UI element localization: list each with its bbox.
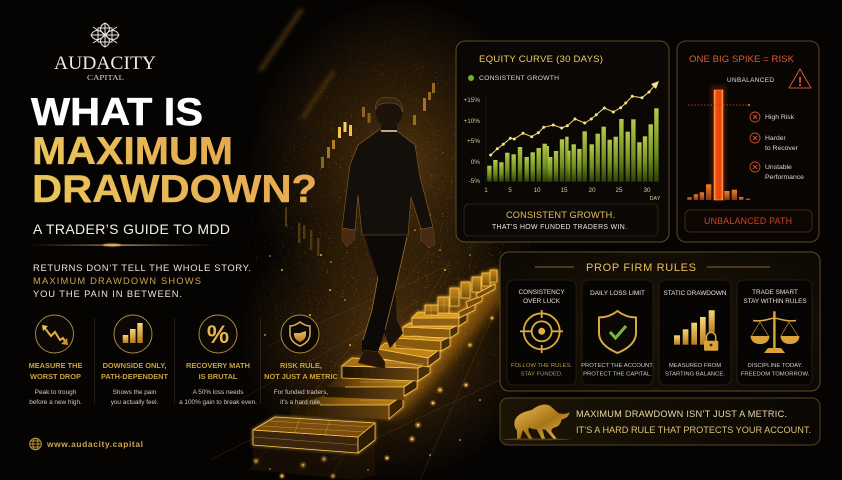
bottom banner	[500, 398, 820, 445]
feature: recovery math	[179, 315, 257, 406]
panel callout	[685, 210, 812, 232]
x axis labels	[484, 187, 661, 202]
feature heading: RISK RULE,	[280, 361, 322, 370]
feature: recovery math: IS BRUTAL	[199, 372, 238, 381]
bar chart	[487, 108, 659, 182]
step 3	[325, 375, 417, 400]
icon: shield	[281, 315, 319, 353]
rear leg and shoe	[383, 285, 403, 348]
x axis labels: 15	[560, 187, 568, 194]
y axis labels: -5%	[469, 178, 480, 185]
panel heading: EQUITY CURVE (30 DAYS)	[479, 54, 603, 65]
card: trade smart	[737, 280, 812, 385]
y axis labels: +5%	[467, 138, 480, 145]
intro line 3: YOU THE PAIN IN BETWEEN.	[33, 288, 182, 299]
panel callout: THAT’S HOW FUNDED TRADERS WIN.	[492, 224, 627, 231]
risk list	[750, 112, 804, 181]
risk item: unstable performance: Performance	[765, 174, 804, 181]
background scene	[210, 7, 558, 480]
card: consistency: STAY FUNDED.	[520, 372, 563, 378]
feature: risk rule	[264, 315, 339, 406]
right hand	[420, 227, 435, 247]
feature: downside only: PATH-DEPENDENT	[101, 372, 169, 381]
icon: percent: %	[207, 321, 229, 349]
panel callout	[464, 204, 658, 236]
feature: measure the worst drop: before a new high.	[29, 399, 82, 406]
jacket	[342, 129, 433, 235]
card: daily loss limit	[581, 280, 654, 385]
title line 2: MAXIMUM	[32, 130, 233, 173]
feature body: Peak to trough	[35, 389, 77, 396]
leg rim lights	[363, 237, 407, 340]
step 7	[403, 323, 458, 338]
card: trade smart: TRADE SMART	[752, 289, 798, 296]
icon: target	[520, 310, 563, 353]
x axis labels: 25	[615, 187, 623, 194]
collar	[381, 129, 397, 132]
panel: equity curve	[456, 41, 669, 242]
intro line 2: MAXIMUM DRAWDOWN SHOWS	[33, 275, 201, 286]
risk item: high risk: High Risk	[765, 114, 795, 121]
logo emblem	[91, 23, 119, 47]
card: consistency	[507, 280, 576, 385]
y axis labels: +15%	[463, 97, 480, 104]
step 2	[292, 392, 403, 419]
step 6	[395, 333, 450, 351]
spike bar chart	[687, 86, 750, 200]
icon: scales	[750, 311, 800, 353]
icon: bars	[114, 315, 152, 353]
card: trade smart: FREEDOM TOMORROW.	[741, 372, 810, 378]
icon: shield with check	[599, 311, 636, 353]
feature: downside only	[101, 315, 169, 406]
spike label: UNBALANCED	[727, 77, 774, 84]
x axis labels: 20	[588, 187, 596, 194]
head	[375, 96, 403, 130]
y axis labels	[463, 97, 480, 185]
x axis labels: DAY	[650, 196, 661, 202]
card: trade smart: STAY WITHIN RULES	[743, 298, 807, 305]
step 1	[253, 417, 375, 453]
legend: CONSISTENT GROWTH	[479, 75, 559, 82]
front leg	[362, 232, 407, 352]
website	[30, 438, 143, 450]
logo subline: CAPITAL	[87, 74, 124, 82]
panel callout: UNBALANCED PATH	[704, 216, 792, 226]
column dividers	[94, 318, 260, 404]
card: consistency: CONSISTENCY	[519, 289, 565, 296]
card: trade smart: DISCIPLINE TODAY.	[748, 363, 803, 369]
front shoe	[358, 350, 385, 369]
card: consistency: OVER LUCK	[523, 298, 561, 305]
panel: prop firm rules	[500, 252, 820, 391]
equity line	[489, 81, 659, 156]
feature: risk rule: it’s a hard rule.	[280, 399, 322, 406]
panel heading: ONE BIG SPIKE = RISK	[689, 54, 795, 65]
left hand	[342, 228, 355, 247]
brand logo	[54, 23, 156, 82]
risk item: unstable performance	[750, 162, 804, 181]
banner text line 2: IT’S A HARD RULE THAT PROTECTS YOUR ACCOUNT.	[576, 425, 811, 435]
feature: downside only: you actually feel.	[111, 399, 159, 406]
x axis labels: 10	[533, 187, 541, 194]
icon: golden bull	[503, 405, 570, 440]
icon: falling arrow	[36, 315, 74, 353]
website address: www.audacity.capital	[46, 439, 143, 449]
icon: warning triangle: !	[798, 74, 802, 89]
title line 3: DRAWDOWN?	[32, 168, 317, 211]
feature body: Shows the pain	[113, 389, 157, 396]
main title	[31, 91, 317, 211]
card: daily loss limit: PROTECT THE ACCOUNT.	[581, 363, 654, 369]
feature body: A 50% loss needs	[193, 389, 243, 396]
feature heading: DOWNSIDE ONLY,	[103, 361, 166, 370]
x axis labels: 30	[643, 187, 651, 194]
card: static drawdown	[659, 280, 731, 385]
risk item: harder to recover: to Recover	[765, 145, 799, 152]
heading rules	[535, 266, 770, 268]
card: static drawdown: STATIC DRAWDOWN	[663, 290, 727, 297]
risk item: harder to recover: Harder	[765, 135, 787, 142]
feature heading: RECOVERY MATH	[186, 361, 250, 370]
panel callout: CONSISTENT GROWTH.	[506, 210, 615, 220]
card: daily loss limit: PROTECT THE CAPITAL.	[583, 372, 652, 378]
y axis labels: 0%	[471, 159, 480, 166]
panel heading: PROP FIRM RULES	[586, 262, 696, 274]
feature: recovery math: a 100% gain to break even.	[179, 399, 257, 406]
banner text line 1: MAXIMUM DRAWDOWN ISN’T JUST A METRIC.	[576, 409, 787, 419]
card: static drawdown: STARTING BALANCE.	[665, 372, 725, 378]
intro paragraph	[33, 262, 251, 299]
risk item: unstable performance: Unstable	[765, 164, 792, 171]
risk item: harder to recover	[750, 133, 799, 152]
feature: risk rule: NOT JUST A METRIC	[264, 372, 339, 381]
intro line 1: RETURNS DON’T TELL THE WHOLE STORY.	[33, 262, 251, 273]
y axis labels: +10%	[463, 118, 480, 125]
step 8	[412, 312, 467, 326]
feature: measure the worst drop: WORST DROP	[30, 372, 81, 381]
title line 1: WHAT IS	[31, 91, 203, 134]
step 5	[378, 343, 440, 367]
step 4	[342, 358, 430, 381]
x axis labels: 1	[484, 187, 488, 194]
upper towers	[425, 270, 497, 318]
gold staircase	[253, 270, 505, 480]
feature body: For funded traders,	[274, 389, 328, 396]
icon: warning triangle	[789, 69, 811, 89]
card: static drawdown: MEASURED FROM	[669, 363, 721, 369]
feature heading: MEASURE THE	[29, 361, 82, 370]
card: consistency: FOLLOW THE RULES.	[511, 363, 573, 369]
logo wordmark: AUDACITY	[54, 53, 156, 74]
step detail lines	[253, 297, 462, 445]
card: daily loss limit: DAILY LOSS LIMIT	[590, 290, 645, 297]
x axis labels: 5	[508, 187, 512, 194]
icon: globe	[30, 438, 41, 450]
feature: measure the worst drop	[29, 315, 82, 406]
man walking up the stairs	[342, 96, 435, 369]
glowing floor particles	[252, 315, 495, 480]
decorative glow line	[30, 244, 215, 246]
panel: one big spike	[677, 41, 819, 242]
subtitle: A TRADER’S GUIDE TO MDD	[33, 221, 230, 237]
icon: bars with lock	[674, 310, 718, 351]
